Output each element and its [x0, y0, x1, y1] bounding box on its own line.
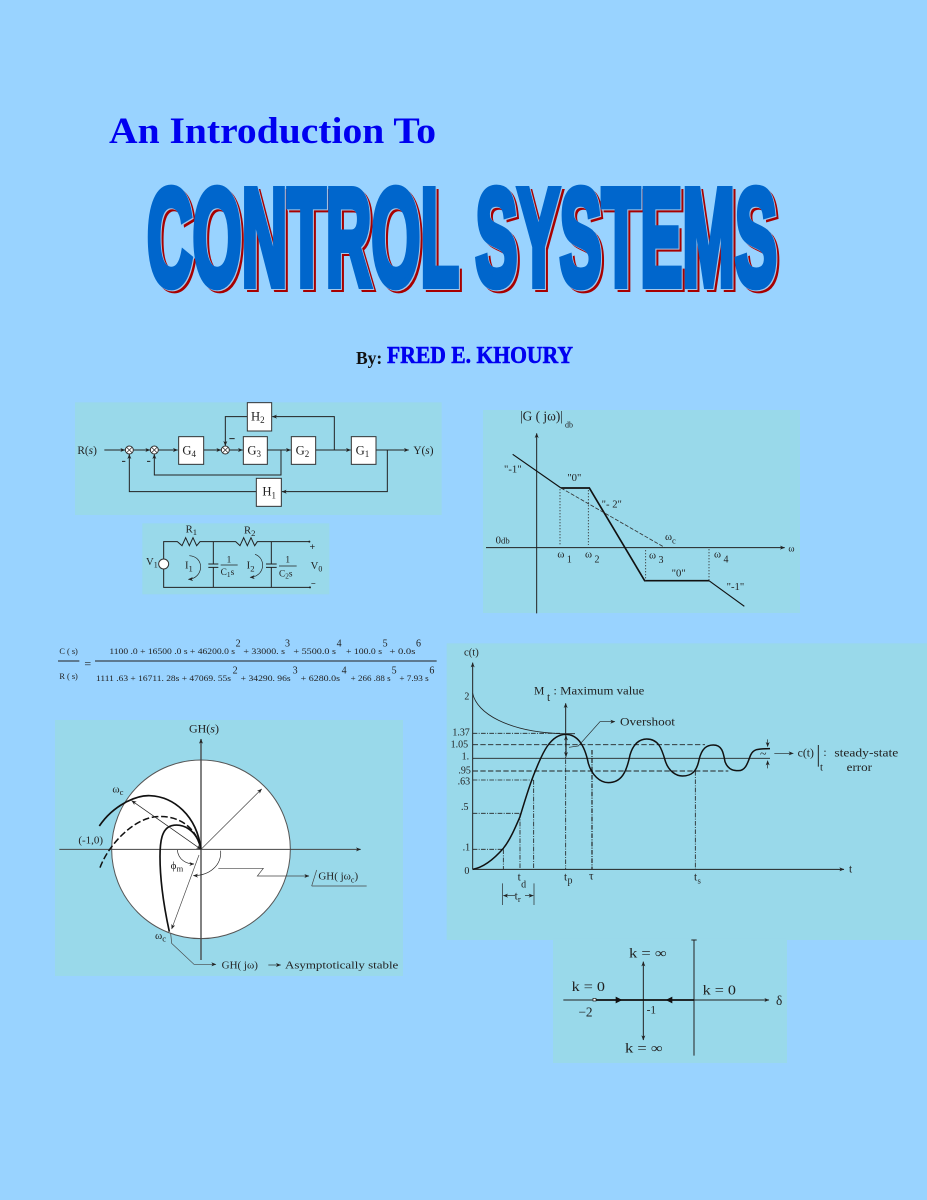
denominator: 4 — [342, 665, 347, 676]
Bode labels: c — [672, 535, 676, 545]
axis tick labels: .95 — [458, 765, 471, 776]
denominator: + 34290. 96s — [241, 674, 291, 683]
transfer function blocks: H — [251, 409, 260, 423]
callout labels: steady-state — [834, 747, 898, 760]
unit circle — [112, 760, 290, 939]
circuit labels: R — [186, 524, 193, 535]
callout labels — [534, 684, 898, 774]
circuit wiring — [164, 538, 310, 587]
circuit labels: 1 — [227, 570, 231, 579]
time labels: p — [567, 875, 572, 886]
numerator: 1100 .0 + 16500 .0 s + 46200.0 s — [109, 647, 235, 656]
time labels: t — [518, 872, 521, 884]
transfer function blocks: G — [182, 443, 191, 457]
Bode labels: "0" — [672, 568, 686, 579]
circuit labels: 1 — [227, 555, 232, 565]
Bode labels: db — [565, 420, 573, 429]
numerator: 4 — [337, 639, 342, 650]
summing junctions — [125, 446, 229, 454]
denominator: 6 — [429, 665, 434, 676]
envelope curve — [473, 693, 575, 734]
Nyquist labels: GH( jω) — [222, 959, 258, 971]
circuit labels: R — [244, 525, 251, 536]
denominator: + 7.93 s — [399, 674, 429, 683]
numerator: + 33000. s — [243, 647, 285, 656]
Nyquist labels: c — [162, 934, 166, 944]
axis tick labels: .5 — [461, 802, 468, 813]
signal lines — [104, 417, 409, 492]
radial arrows — [132, 789, 367, 965]
Bode labels: |G ( jω)| — [520, 409, 563, 424]
transfer function blocks: G — [356, 443, 365, 457]
circuit labels: 1 — [193, 527, 197, 537]
axes — [486, 433, 785, 613]
callout labels: M — [534, 684, 544, 697]
transfer function blocks: 2 — [305, 449, 309, 459]
transfer function blocks: 1 — [271, 490, 276, 500]
circuit labels: 0 — [318, 565, 322, 574]
panel: block diagram — [75, 402, 442, 515]
Nyquist labels: Asymptotically stable — [285, 959, 398, 971]
Nyquist labels: ω — [155, 930, 162, 942]
axis tick labels: 0 — [464, 866, 469, 877]
panel: Bode plot — [483, 409, 800, 613]
numerator: 2 — [236, 639, 241, 650]
annotation arrows — [502, 703, 818, 905]
circuit labels: s — [289, 569, 293, 579]
Nyquist labels: (-1,0) — [78, 834, 103, 846]
Bode labels: 4 — [721, 554, 729, 565]
transfer function equation: C ( s) — [59, 647, 78, 656]
circuit labels: s — [231, 568, 235, 578]
title: An Introduction To: An Introduction To — [109, 111, 436, 152]
circuit labels: I — [185, 560, 189, 571]
transfer function blocks: G — [296, 443, 305, 457]
circuit labels: 2 — [285, 571, 289, 580]
Bode labels: ω — [585, 550, 592, 561]
denominator: 3 — [293, 665, 298, 676]
panel: root locus — [553, 938, 787, 1063]
axis tick labels: .1 — [463, 843, 470, 854]
panel: step response — [447, 643, 927, 940]
transfer function blocks: 2 — [260, 415, 265, 425]
denominator: 5 — [392, 665, 397, 676]
callout labels: t — [547, 692, 551, 704]
dotted frequency markers — [560, 489, 709, 581]
numerator: 6 — [416, 639, 421, 650]
callout labels: c(t) — [798, 747, 814, 760]
root locus labels: δ — [776, 993, 782, 1008]
Bode labels: "0" — [567, 473, 581, 484]
root locus labels: -1 — [647, 1005, 656, 1017]
Nyquist labels: ) — [354, 871, 358, 883]
transfer function blocks: H — [262, 485, 271, 499]
circuit labels: C — [221, 568, 227, 578]
axes — [59, 739, 361, 960]
terminals — [308, 541, 311, 588]
circuit labels: 1 — [189, 564, 193, 574]
numerator — [109, 639, 421, 656]
axis tick labels: 2 — [464, 691, 469, 702]
Nyquist curves — [99, 796, 201, 932]
circuit labels: V — [311, 561, 318, 572]
transfer function blocks: 3 — [256, 449, 261, 459]
Nyquist labels — [78, 721, 398, 971]
dashed crossover line — [561, 488, 665, 548]
circuit labels: 1 — [285, 555, 290, 565]
root locus labels: −2 — [578, 1005, 593, 1020]
denominator: + 6280.0s — [301, 674, 340, 683]
Bode labels — [496, 409, 794, 593]
signal labels — [77, 439, 434, 461]
axis tick labels: 1. — [462, 751, 469, 762]
Bode labels: ω — [714, 550, 721, 561]
time labels: d — [521, 879, 526, 890]
transfer function equation: = — [84, 656, 91, 670]
callout labels: ~ — [760, 746, 767, 760]
root locus labels: k = ∞ — [629, 946, 667, 961]
Nyquist labels: ϕ — [171, 860, 176, 872]
callout labels: error — [847, 761, 872, 774]
panel: Nyquist plot — [55, 720, 403, 976]
circuit labels — [146, 524, 322, 584]
time labels — [515, 870, 701, 904]
time labels: t — [515, 890, 518, 902]
Bode labels: ω — [665, 532, 672, 543]
Nyquist labels: m — [176, 864, 183, 874]
Nyquist labels: GH(s) — [189, 721, 219, 735]
circuit labels: C — [279, 569, 285, 579]
Nyquist labels: c — [120, 787, 124, 797]
Bode labels: 3 — [656, 555, 664, 566]
transfer function blocks: G — [247, 443, 256, 457]
circuit labels: 2 — [250, 564, 255, 574]
Bode labels: 0db — [496, 535, 510, 546]
circuit labels: V — [146, 557, 154, 568]
locus branches — [594, 997, 694, 1003]
Bode labels: "-1" — [727, 582, 744, 593]
root locus labels — [572, 946, 782, 1055]
circuit labels: 2 — [251, 528, 255, 538]
signal labels: R(s) — [77, 445, 97, 457]
voltage source — [159, 559, 169, 569]
circuit labels: I — [247, 560, 250, 571]
Bode labels: "- 2" — [602, 500, 622, 511]
time labels: t — [564, 872, 567, 884]
axes — [563, 940, 769, 1056]
axis tick labels: c(t) — [464, 647, 479, 658]
author line: By: — [356, 348, 382, 368]
reference lines — [473, 733, 770, 869]
axis tick labels: t — [849, 863, 853, 875]
transfer function blocks: 4 — [191, 449, 196, 459]
numerator: 5 — [383, 639, 388, 650]
Bode labels: ω — [649, 550, 656, 561]
axis tick labels — [451, 647, 853, 877]
numerator: 3 — [285, 639, 290, 650]
transfer function blocks: 1 — [365, 449, 369, 459]
Bode labels: 2 — [592, 554, 600, 565]
time labels: τ — [589, 870, 594, 882]
root locus labels: k = ∞ — [625, 1040, 663, 1055]
callout labels: t — [820, 763, 823, 774]
Nyquist labels: c — [351, 875, 355, 884]
time labels: r — [518, 894, 521, 904]
axis tick labels: 1.37 — [452, 727, 470, 738]
Nyquist labels: GH( jω — [318, 871, 351, 883]
denominator: 2 — [233, 665, 238, 676]
Bode labels: "-1" — [504, 464, 522, 475]
transfer function equation: R ( s) — [59, 672, 78, 681]
axis tick labels: 1.05 — [451, 739, 468, 750]
Nyquist labels: ω — [112, 783, 120, 795]
signal labels: Y(s) — [413, 445, 434, 457]
numerator: + 100.0 s — [346, 647, 382, 656]
locus direction arrowheads — [616, 997, 672, 1003]
axis tick labels: .63 — [458, 776, 470, 787]
author line: FRED E. KHOURY — [387, 343, 573, 369]
denominator: + 266 .88 s — [351, 674, 391, 683]
callout labels: : — [823, 746, 827, 759]
denominator — [96, 665, 434, 683]
Bode labels: ω — [557, 550, 564, 561]
response curve — [473, 734, 770, 869]
callout labels: : Maximum value — [553, 684, 644, 697]
callout labels: Overshoot — [620, 716, 676, 729]
denominator: 1111 .63 + 16711. 28s + 47069. 55s — [96, 674, 231, 683]
root locus labels: k = 0 — [572, 979, 605, 994]
Bode labels: 1 — [564, 554, 572, 565]
numerator: + 5500.0 s — [293, 647, 336, 656]
loop current arrows — [188, 554, 263, 579]
root locus labels: k = 0 — [703, 983, 736, 998]
numerator: + 0.0s — [389, 647, 415, 656]
circuit labels: 1 — [154, 561, 158, 570]
panel: RC circuit — [142, 523, 329, 594]
open-loop pole — [593, 998, 596, 1001]
Bode labels: ω — [788, 545, 794, 555]
asymptote curve — [513, 454, 561, 488]
time labels: s — [697, 875, 701, 885]
transfer function equation — [58, 639, 437, 683]
transfer function blocks — [179, 403, 376, 506]
time labels: t — [694, 872, 697, 884]
axes — [473, 663, 844, 869]
